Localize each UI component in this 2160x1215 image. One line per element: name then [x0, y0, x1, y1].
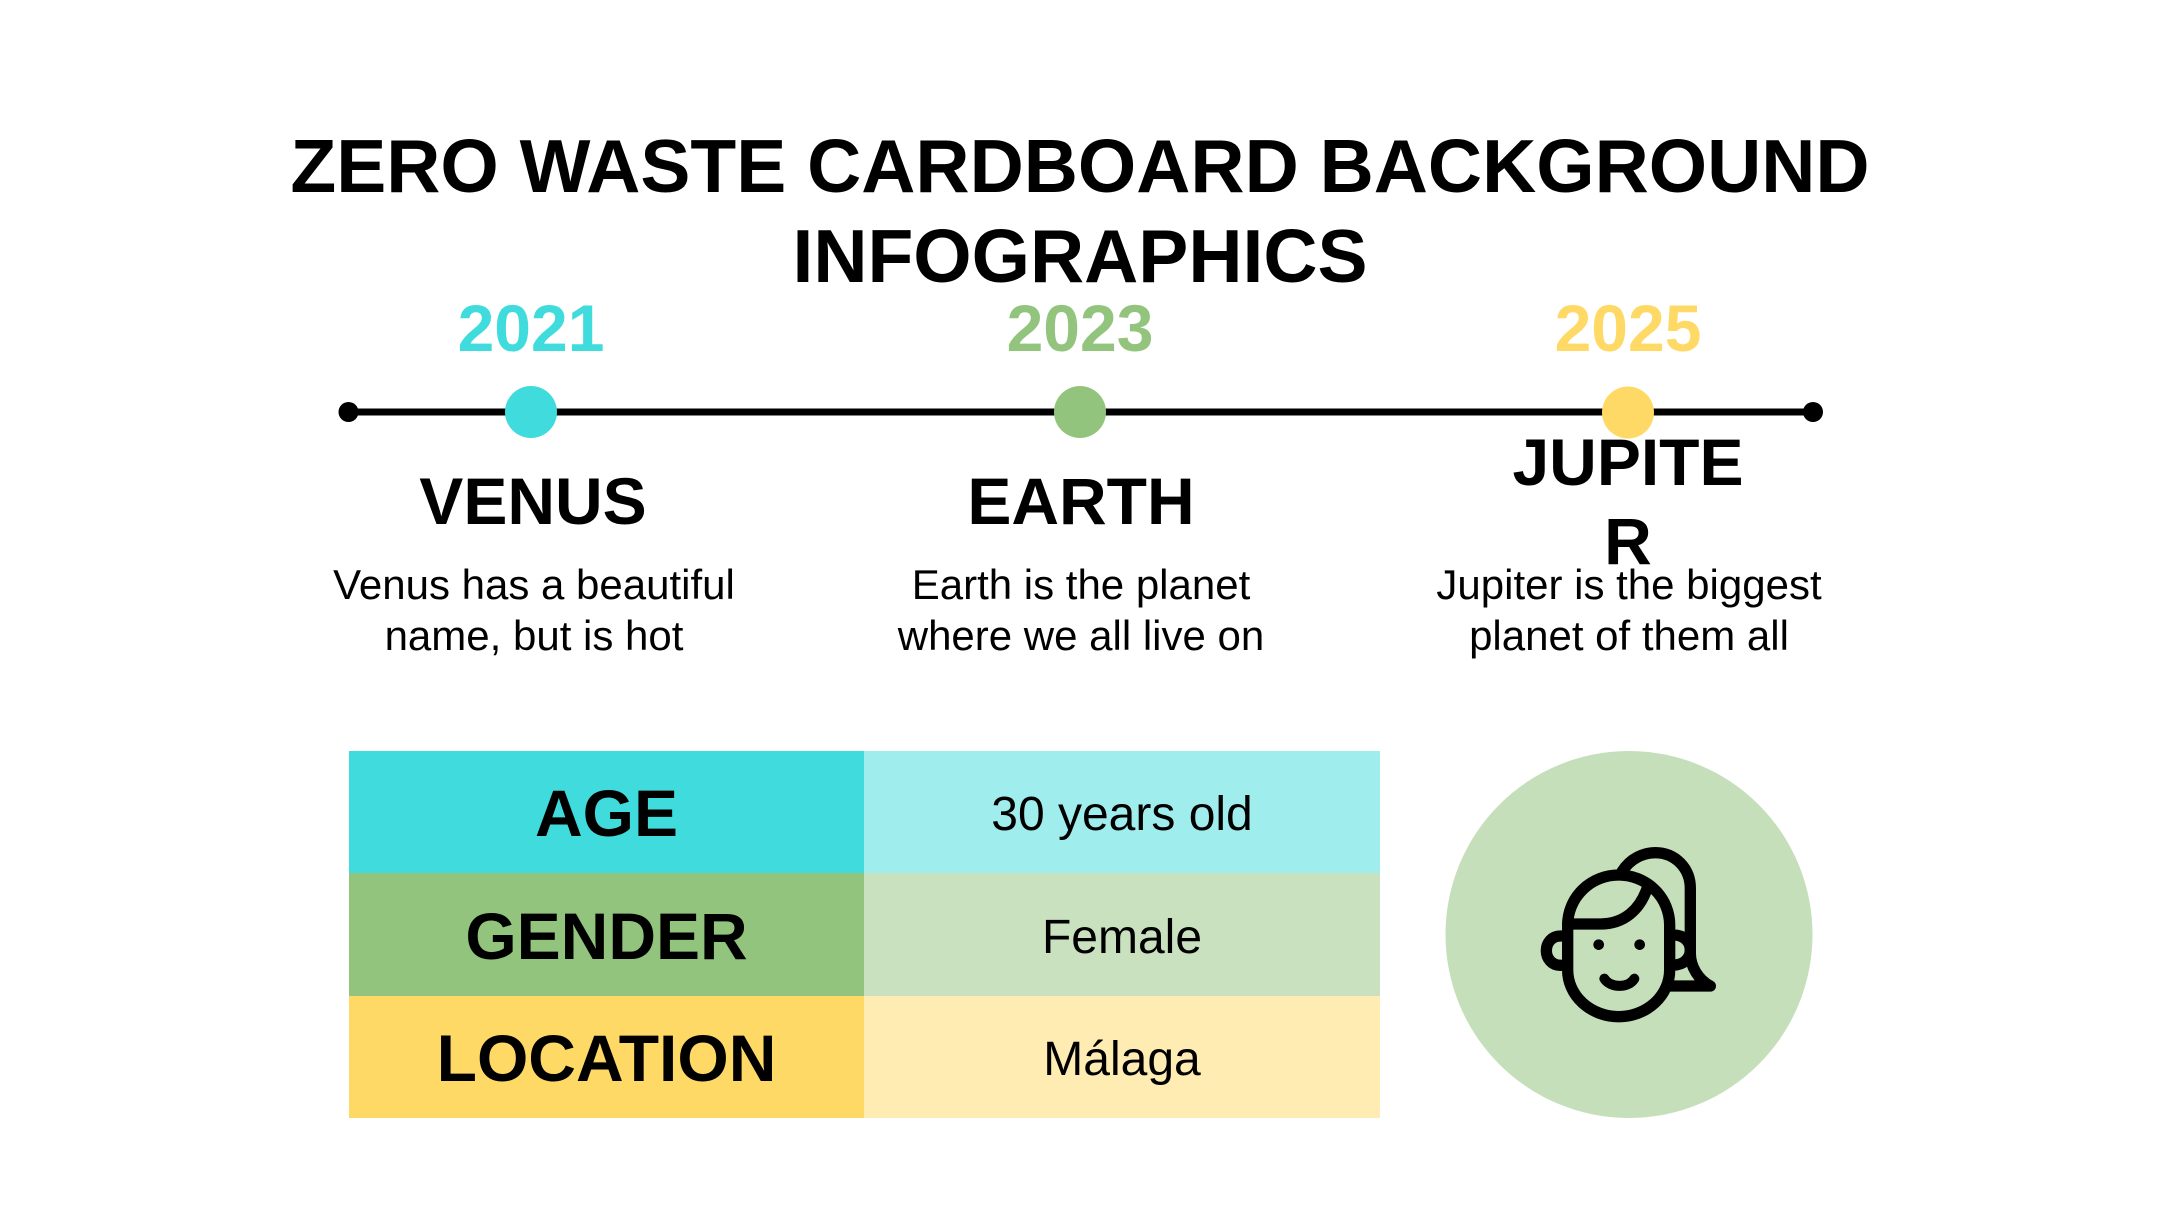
heading: Jupiter: JUPITE [1512, 425, 1744, 499]
year 2023: 2023 [1007, 291, 1153, 365]
heading: Jupiter: R [1604, 504, 1652, 578]
cell: location value [864, 996, 1380, 1118]
year 2021: 2021 [458, 291, 604, 365]
text: Jupiter description: Jupiter is the biggest [1436, 561, 1822, 608]
text: Jupiter description: planet of them all [1469, 612, 1789, 659]
cell: gender value: Female [1042, 910, 1202, 964]
text: Jupiter description [1436, 561, 1822, 659]
icon: woman face in green circle [1446, 751, 1812, 1118]
text: Venus description: Venus has a beautiful [333, 561, 735, 608]
table: profile [349, 751, 1380, 1118]
title: ZERO WASTE CARDBOARD BACKGROUND [290, 124, 1870, 208]
text: Earth description: Earth is the planet [912, 561, 1250, 608]
text: Earth description: where we all live on [898, 612, 1264, 659]
cell: age value: 30 years old [991, 788, 1253, 841]
title [290, 124, 1870, 298]
title: INFOGRAPHICS [792, 214, 1368, 298]
heading: Earth: EARTH [967, 464, 1195, 538]
cell: gender label [349, 873, 864, 996]
text: Venus description: name, but is hot [385, 612, 683, 659]
cell: location label: LOCATION [437, 1021, 776, 1095]
year 2025: 2025 [1555, 291, 1701, 365]
text: Earth description [898, 561, 1264, 659]
cell: location label [349, 996, 864, 1118]
cell: location value: Málaga [1043, 1033, 1201, 1086]
cell: age label [349, 751, 864, 873]
cell: age value [864, 751, 1380, 873]
text: Venus description [333, 561, 735, 659]
heading: Jupiter [1512, 425, 1744, 578]
cell: age label: AGE [535, 776, 678, 850]
cell: gender label: GENDER [465, 898, 748, 972]
heading: Venus: VENUS [419, 464, 647, 538]
cell: gender value [864, 873, 1380, 996]
